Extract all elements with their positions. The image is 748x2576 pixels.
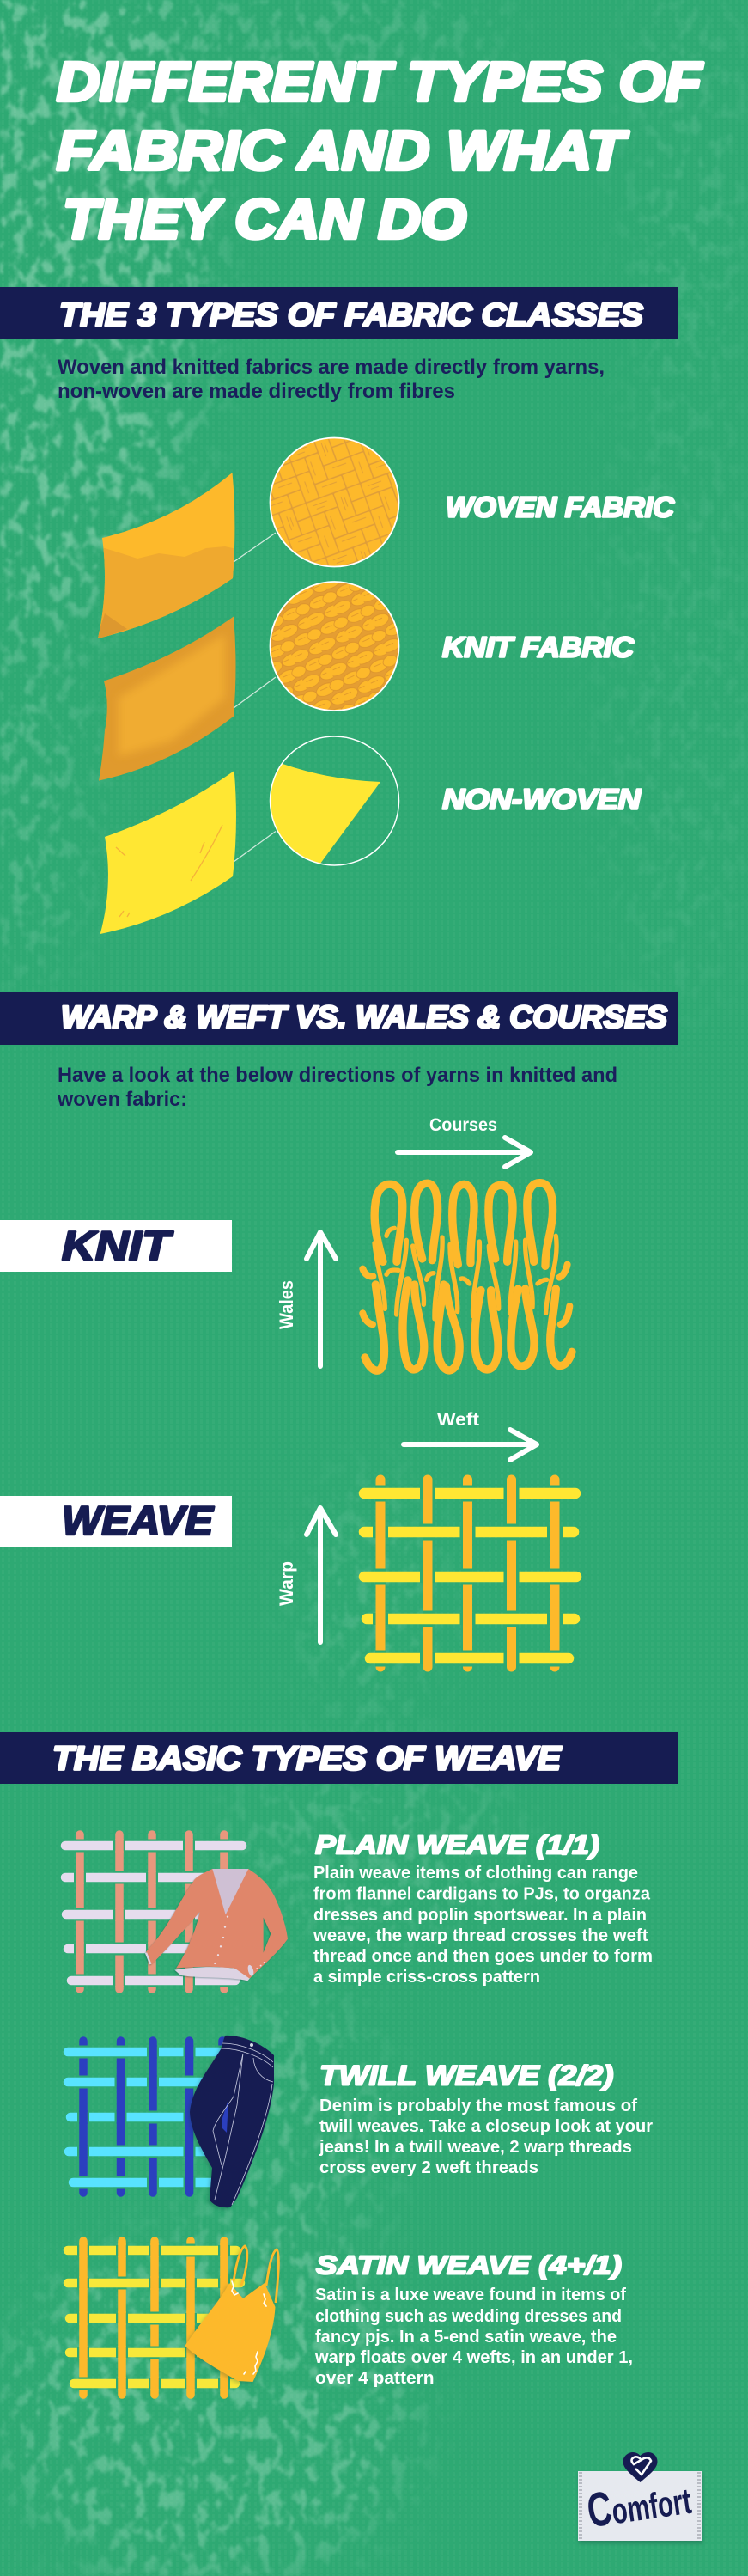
weave heading: WEAVE [62,1498,215,1543]
twill weave description: jeans! In a twill weave, 2 warp threads [319,2137,632,2157]
satin weave grid [68,2241,240,2395]
weft arrow [404,1430,537,1460]
knit magnified circle [270,582,398,711]
panel: knit fabric [99,582,635,781]
title: THEY CAN DO [63,188,466,250]
woven swatch [98,473,235,638]
plain weave description: weave, the warp thread crosses the weft [313,1926,648,1945]
non-woven swatch [100,771,236,934]
twill weave description: cross every 2 weft threads [319,2158,538,2177]
title [57,51,703,250]
leader line [234,832,276,862]
twill weave description: twill weaves. Take a closeup look at your [319,2116,653,2136]
icon: jeans [190,2036,274,2207]
title: DIFFERENT TYPES OF [57,51,703,113]
satin weave description [314,2285,633,2388]
label tag [578,2471,702,2541]
courses arrow [398,1138,531,1167]
leader line [234,533,276,562]
knit stitch illustration [362,1183,572,1370]
panel: satin weave [68,2241,633,2395]
weave heading [0,1496,232,1547]
twill weave grid [68,2041,227,2193]
twill weave description [319,2096,653,2177]
satin weave heading: SATIN WEAVE (4+/1) [316,2249,622,2280]
heart emblem [623,2452,658,2482]
knit swatch [99,617,235,781]
panel: knit diagram [0,1115,572,1370]
non-woven magnified circle [258,736,398,870]
section heading: the basic types of weave [0,1732,678,1784]
intro text: fabric classes: Woven and knitted fabrics are made directly from yarns, [58,356,605,379]
wales arrow [307,1232,336,1366]
satin weave description: clothing such as wedding dresses and [315,2306,622,2326]
panel: non-woven [100,736,642,934]
knit label: KNIT FABRIC [442,631,635,663]
intro text: yarn directions [57,1064,617,1111]
plain weave description: dresses and poplin sportswear. In a plain [313,1905,647,1925]
plain weave grid [65,1834,242,1989]
twill weave description: Denim is probably the most famous of [319,2096,637,2115]
satin weave description: fancy pjs. In a 5-end satin weave, the [315,2327,617,2347]
non-woven label: NON-WOVEN [442,784,642,815]
twill weave heading: TWILL WEAVE (2/2) [319,2060,613,2091]
intro text: fabric classes [58,356,605,403]
plain weave heading: PLAIN WEAVE (1/1) [315,1830,599,1859]
panel: twill weave [68,2036,653,2207]
plain weave description: Plain weave items of clothing can range [313,1863,638,1883]
plain weave description: a simple criss-cross pattern [313,1967,540,1987]
plain weave description [313,1863,653,1987]
section heading: warp and weft vs wales and courses [0,992,678,1045]
knit heading [0,1220,232,1272]
logo: comfort fabric label [578,2452,702,2541]
plain weave description: thread once and then goes under to form [313,1946,653,1966]
courses label: Courses [429,1115,497,1135]
section heading: warp and weft vs wales and courses: WARP & WEFT VS. WALES & COURSES [61,999,667,1035]
section heading: the basic types of weave: THE BASIC TYPES OF WEAVE [52,1741,562,1777]
icon: satin top [185,2246,278,2382]
plain weave description: from flannel cardigans to PJs, to organza [313,1883,651,1904]
brand wordmark: Comfort [584,2469,694,2537]
leader line [234,677,276,708]
weave grid illustration [364,1480,576,1667]
intro text: yarn directions: woven fabric: [57,1088,187,1111]
panel: weave diagram [0,1410,576,1667]
weft label: Weft [437,1410,479,1430]
woven magnified circle [270,438,398,567]
panel: plain weave [65,1830,653,1989]
intro text: yarn directions: Have a look at the below directions of yarns in knitted and [58,1064,617,1087]
satin weave description: warp floats over 4 wefts, in an under 1, [314,2347,633,2367]
title: FABRIC AND WHAT [57,119,629,181]
section heading: the 3 types of fabric classes [0,287,678,339]
knit heading: KNIT [62,1223,174,1268]
warp arrow [307,1508,336,1642]
warp label: Warp [276,1561,297,1606]
section heading: the 3 types of fabric classes: THE 3 TYPES OF FABRIC CLASSES [59,297,643,333]
woven label: WOVEN FABRIC [446,491,675,522]
panel: woven fabric [90,438,675,653]
satin weave description: Satin is a luxe weave found in items of [315,2285,626,2304]
icon: cardigan [146,1869,288,1981]
intro text: fabric classes: non-woven are made directly from fibres [58,380,455,403]
wales label: Wales [276,1280,297,1329]
satin weave description: over 4 pattern [315,2368,435,2388]
